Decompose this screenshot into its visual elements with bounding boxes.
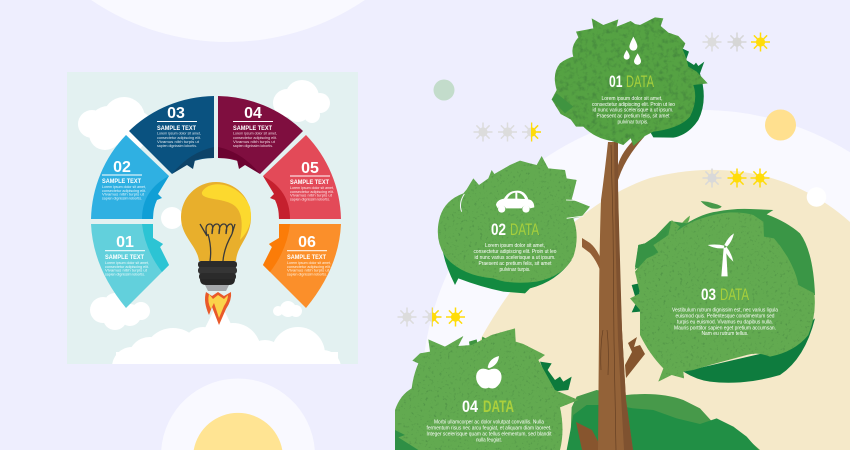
yellow dot — [765, 110, 796, 140]
sun rating row 1 — [474, 122, 541, 142]
heading 01 data: DATA — [626, 72, 654, 91]
body text 02 — [474, 243, 557, 273]
cream hill — [480, 170, 850, 450]
segment 03: Lorem ipsum dolor sit amet, — [157, 132, 201, 136]
top pale circle — [91, 0, 365, 42]
body text 02: id nunc varius scelerisque a ut ipsum. — [474, 255, 556, 261]
segment 02: Lorem ipsum dolor sit amet, — [102, 185, 146, 189]
clouds — [78, 80, 341, 388]
segment 03: SAMPLE TEXT — [157, 126, 196, 132]
sun rating row 4 — [398, 308, 465, 326]
body text 01: consectetur adipiscing elit. Proin ut leo — [592, 102, 675, 108]
segment 01: 01 — [116, 234, 134, 251]
body text 03 — [672, 308, 778, 337]
body text 04: Integer scelerisque quam ac tellus elementum, sed blandit — [426, 432, 552, 438]
body text 02: Praesent ac pretium felis, sit amet — [478, 261, 552, 267]
segment 04: sapien dignissim lobortis. — [233, 144, 273, 148]
body text 02: consectetur adipiscing elit. Proin ut leo — [474, 249, 557, 255]
segment 06: Lorem ipsum dolor sit amet, — [287, 261, 331, 265]
segment 06: sapien dignissim lobortis. — [287, 272, 327, 276]
green dot — [434, 80, 454, 100]
icon: rocket light bulb — [181, 182, 251, 325]
lower left branch — [576, 422, 600, 450]
heading 04 data — [462, 397, 514, 416]
tree crown 04 — [395, 328, 578, 450]
heading 02 data: 02 — [491, 220, 506, 239]
trunk shadow — [614, 142, 633, 450]
segment 03: Vivamus nibh turpis ut — [157, 140, 199, 144]
heading 03 data: DATA — [720, 285, 749, 304]
body text 02: pulvinar turpis. — [500, 267, 530, 273]
segment 06 — [263, 224, 341, 308]
tree crown 03 — [630, 201, 815, 383]
heading 03 data: 03 — [701, 285, 716, 304]
body text 04: Morbi ullamcorper ac dolor volutpat convallis. Nulla — [434, 420, 544, 426]
segment 04: 04 — [244, 105, 262, 122]
segment 06: Vivamus nibh turpis ut — [287, 269, 329, 273]
segment 05: Lorem ipsum dolor sit amet, — [290, 186, 334, 190]
sun rating row 3 — [702, 168, 770, 188]
body text 03: Vestibulum rutrum dignissim est, nec varius ligula — [672, 308, 778, 314]
segment 04: Vivamus nibh turpis ut — [233, 140, 275, 144]
segment 05 — [263, 135, 341, 219]
segment 06: SAMPLE TEXT — [287, 255, 326, 261]
body text 03: Mauris porttitor sapien eget pretium accumsan. — [674, 326, 776, 332]
upper right branch — [618, 134, 644, 180]
heading 02 data: DATA — [510, 220, 539, 239]
segment 05: Vivamus nibh turpis ut — [290, 194, 332, 198]
segment 02 — [91, 135, 169, 219]
segment 01: Vivamus nibh turpis ut — [105, 269, 147, 273]
right large pale circle — [422, 110, 850, 450]
icon: apple — [476, 356, 502, 388]
panel background — [67, 72, 358, 364]
segment 02: 02 — [113, 159, 131, 176]
body text 01: Lorem ipsum dolor sit amet, — [602, 96, 662, 102]
heading 01 data — [609, 72, 654, 91]
heading 02 data — [491, 220, 539, 239]
bottom pale circle — [161, 379, 315, 450]
white dot — [807, 187, 826, 207]
panel: light bulb infographic — [67, 72, 358, 388]
segment 05: sapien dignissim lobortis. — [290, 198, 330, 202]
tree crown 01 — [552, 17, 708, 146]
segment 04 — [218, 96, 303, 174]
segment 04: Lorem ipsum dolor sit amet, — [233, 132, 277, 136]
segment 02: Vivamus nibh turpis ut — [102, 193, 144, 197]
segment 03: consectetur adipiscing elit. — [157, 136, 201, 140]
segment 02: consectetur adipiscing elit. — [102, 189, 146, 193]
segment 01: consectetur adipiscing elit. — [105, 265, 149, 269]
segment 04: SAMPLE TEXT — [233, 126, 272, 132]
segment 02: SAMPLE TEXT — [102, 179, 141, 185]
segment 05: 05 — [301, 160, 319, 177]
heading 04 data: 04 — [462, 397, 478, 416]
icon: water drops — [624, 37, 641, 65]
segment 01: SAMPLE TEXT — [105, 255, 144, 261]
trunk — [598, 142, 633, 450]
bottom yellow circle — [194, 413, 282, 450]
body text 03: Nam eu rutrum tellus. — [702, 331, 748, 337]
segment 06: consectetur adipiscing elit. — [287, 265, 331, 269]
tree trunk and branches — [576, 134, 645, 450]
body text 03: euismod quis. Pellentesque condimentum sed — [676, 314, 775, 320]
heading 04 data: DATA — [483, 397, 514, 416]
body text 01: pulvinar turpis. — [618, 120, 648, 126]
left branch — [582, 238, 600, 270]
tree crown 02 — [438, 156, 590, 293]
heading 03 data — [701, 285, 749, 304]
body text 01 — [592, 96, 675, 126]
segment 03 — [129, 96, 214, 174]
icon: car — [496, 191, 534, 213]
segment 02: sapien dignissim lobortis. — [102, 196, 142, 200]
segment 01 — [91, 224, 169, 308]
body text 03: turpis eu euismod. Vivamus eu dapibus nulla. — [677, 320, 773, 326]
sun rating row 2 — [702, 32, 770, 52]
segment 06: 06 — [298, 234, 316, 251]
segment 05: SAMPLE TEXT — [290, 180, 329, 186]
body text 04 — [426, 420, 552, 444]
body text 01: Praesent ac pretium felis, sit amet — [596, 114, 670, 120]
segment 05: consectetur adipiscing elit. — [290, 190, 334, 194]
body text 04: nulla feugiat. — [476, 438, 502, 444]
segment 04: consectetur adipiscing elit. — [233, 136, 277, 140]
lower right branch — [625, 337, 645, 378]
segment 01: sapien dignissim lobortis. — [105, 272, 145, 276]
heading 01 data: 01 — [609, 72, 622, 91]
body text 02: Lorem ipsum dolor sit amet, — [485, 243, 545, 249]
body text 01: id nunc varius scelerisque a ut ipsum. — [592, 108, 674, 114]
segment 03: 03 — [167, 105, 185, 122]
body text 04: fermentum risus nec arcu feugiat, et aliquam diam laoreet. — [426, 426, 552, 432]
icon: wind turbine — [708, 233, 734, 276]
segment 03: sapien dignissim lobortis. — [157, 144, 197, 148]
bottom bush — [567, 390, 760, 450]
segment 01: Lorem ipsum dolor sit amet, — [105, 261, 149, 265]
